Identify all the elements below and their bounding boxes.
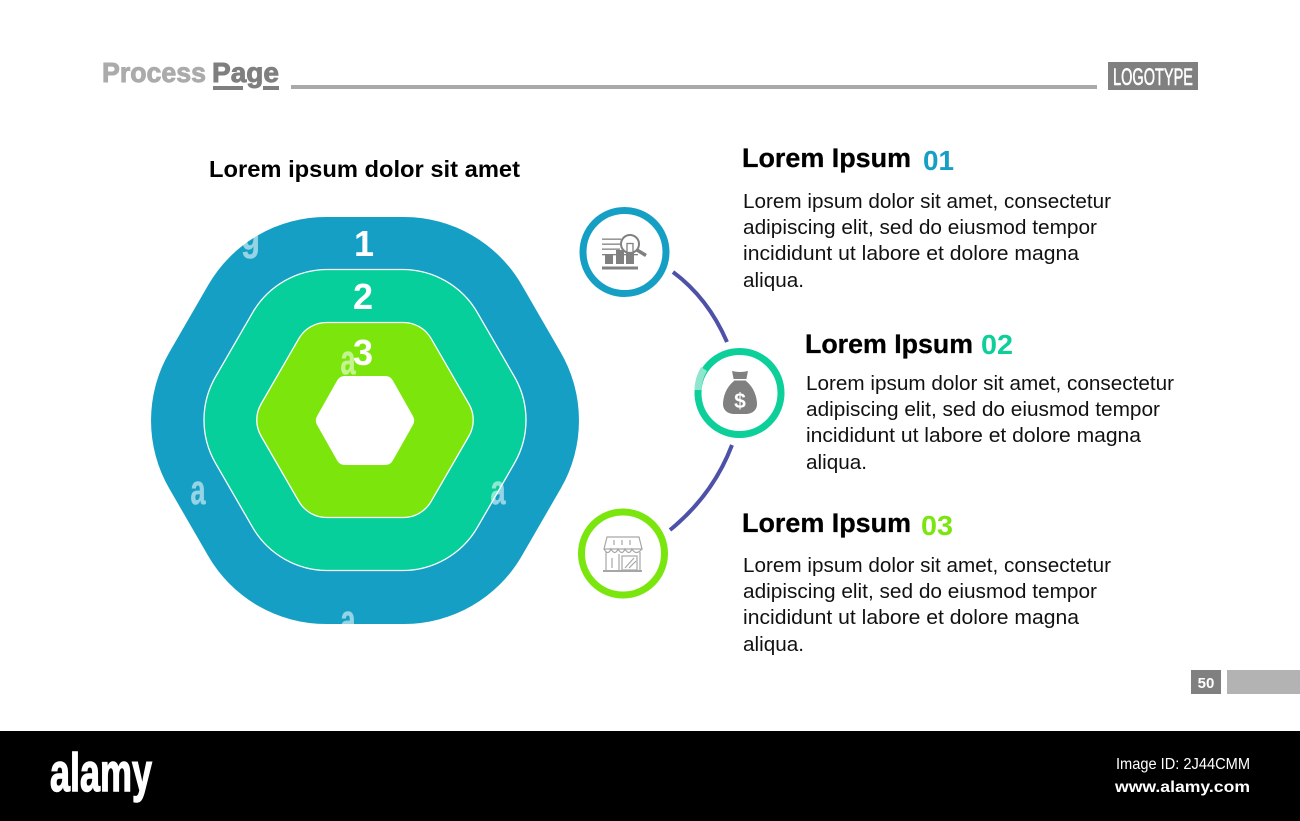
watermark marks bbox=[190, 212, 506, 643]
text block 01 bbox=[742, 143, 1111, 292]
number 03: 03 bbox=[921, 510, 953, 541]
website: www.alamy.com bbox=[1114, 779, 1250, 796]
icon circle 2: money bag bbox=[698, 352, 781, 434]
watermark marks: g bbox=[241, 212, 260, 259]
layer 2 bbox=[204, 269, 526, 571]
heading 01: Lorem Ipsum bbox=[742, 143, 911, 173]
logotype: LOGOTYPE bbox=[1113, 64, 1193, 91]
number 01: 01 bbox=[923, 145, 954, 176]
heading 03: Lorem Ipsum bbox=[742, 508, 911, 538]
icon circle 3: storefront bbox=[582, 512, 664, 595]
footer logo: alamy bbox=[50, 743, 152, 803]
body 03 bbox=[743, 554, 1111, 656]
center hole bbox=[316, 376, 414, 465]
layer 1 bbox=[151, 217, 579, 624]
body 03: adipiscing elit, sed do eiusmod tempor bbox=[743, 580, 1097, 603]
number 1: 1 bbox=[354, 223, 374, 264]
body 02: adipiscing elit, sed do eiusmod tempor bbox=[806, 398, 1160, 421]
body 02: Lorem ipsum dolor sit amet, consectetur bbox=[806, 372, 1174, 395]
watermark marks: a bbox=[190, 466, 206, 513]
connector arc top bbox=[673, 272, 727, 342]
icon circle 2: money bag: $ bbox=[734, 390, 746, 413]
icon circle 1: chart and magnifier bbox=[583, 210, 666, 294]
body 02: aliqua. bbox=[806, 451, 867, 474]
logotype bbox=[1108, 62, 1198, 91]
heading 02: Lorem Ipsum bbox=[805, 329, 973, 359]
body 02: incididunt ut labore et dolore magna bbox=[806, 424, 1142, 447]
page bar bbox=[1227, 670, 1300, 694]
text block 03 bbox=[742, 508, 1111, 656]
number 02: 02 bbox=[981, 329, 1013, 360]
body 01: Lorem ipsum dolor sit amet, consectetur bbox=[743, 190, 1111, 213]
watermark marks: a bbox=[340, 336, 356, 383]
body 01: adipiscing elit, sed do eiusmod tempor bbox=[743, 216, 1097, 239]
number 3: 3 bbox=[353, 332, 373, 373]
body 03: aliqua. bbox=[743, 633, 804, 656]
image id: Image ID: 2J44CMM bbox=[1116, 756, 1250, 773]
watermark marks: a bbox=[340, 596, 356, 643]
header rule bbox=[291, 85, 1097, 89]
layer 3 bbox=[257, 322, 473, 518]
page number: 50 bbox=[1198, 675, 1214, 692]
body 03: incididunt ut labore et dolore magna bbox=[743, 606, 1080, 629]
hexagon chart bbox=[151, 217, 579, 624]
header title: Process bbox=[102, 57, 206, 88]
header title bbox=[102, 57, 279, 90]
body 01 bbox=[743, 190, 1111, 292]
page number bbox=[1191, 670, 1221, 694]
body 03: Lorem ipsum dolor sit amet, consectetur bbox=[743, 554, 1111, 577]
chart heading: Lorem ipsum dolor sit amet bbox=[209, 156, 520, 182]
body 01: aliqua. bbox=[743, 269, 804, 292]
number 2: 2 bbox=[353, 276, 373, 317]
footer band bbox=[0, 731, 1300, 821]
body 01: incididunt ut labore et dolore magna bbox=[743, 242, 1080, 265]
connector arc bottom bbox=[670, 445, 732, 530]
header title: Page bbox=[212, 57, 279, 88]
watermark marks: a bbox=[490, 466, 506, 513]
body 02 bbox=[806, 372, 1174, 474]
text block 02 bbox=[805, 329, 1174, 474]
